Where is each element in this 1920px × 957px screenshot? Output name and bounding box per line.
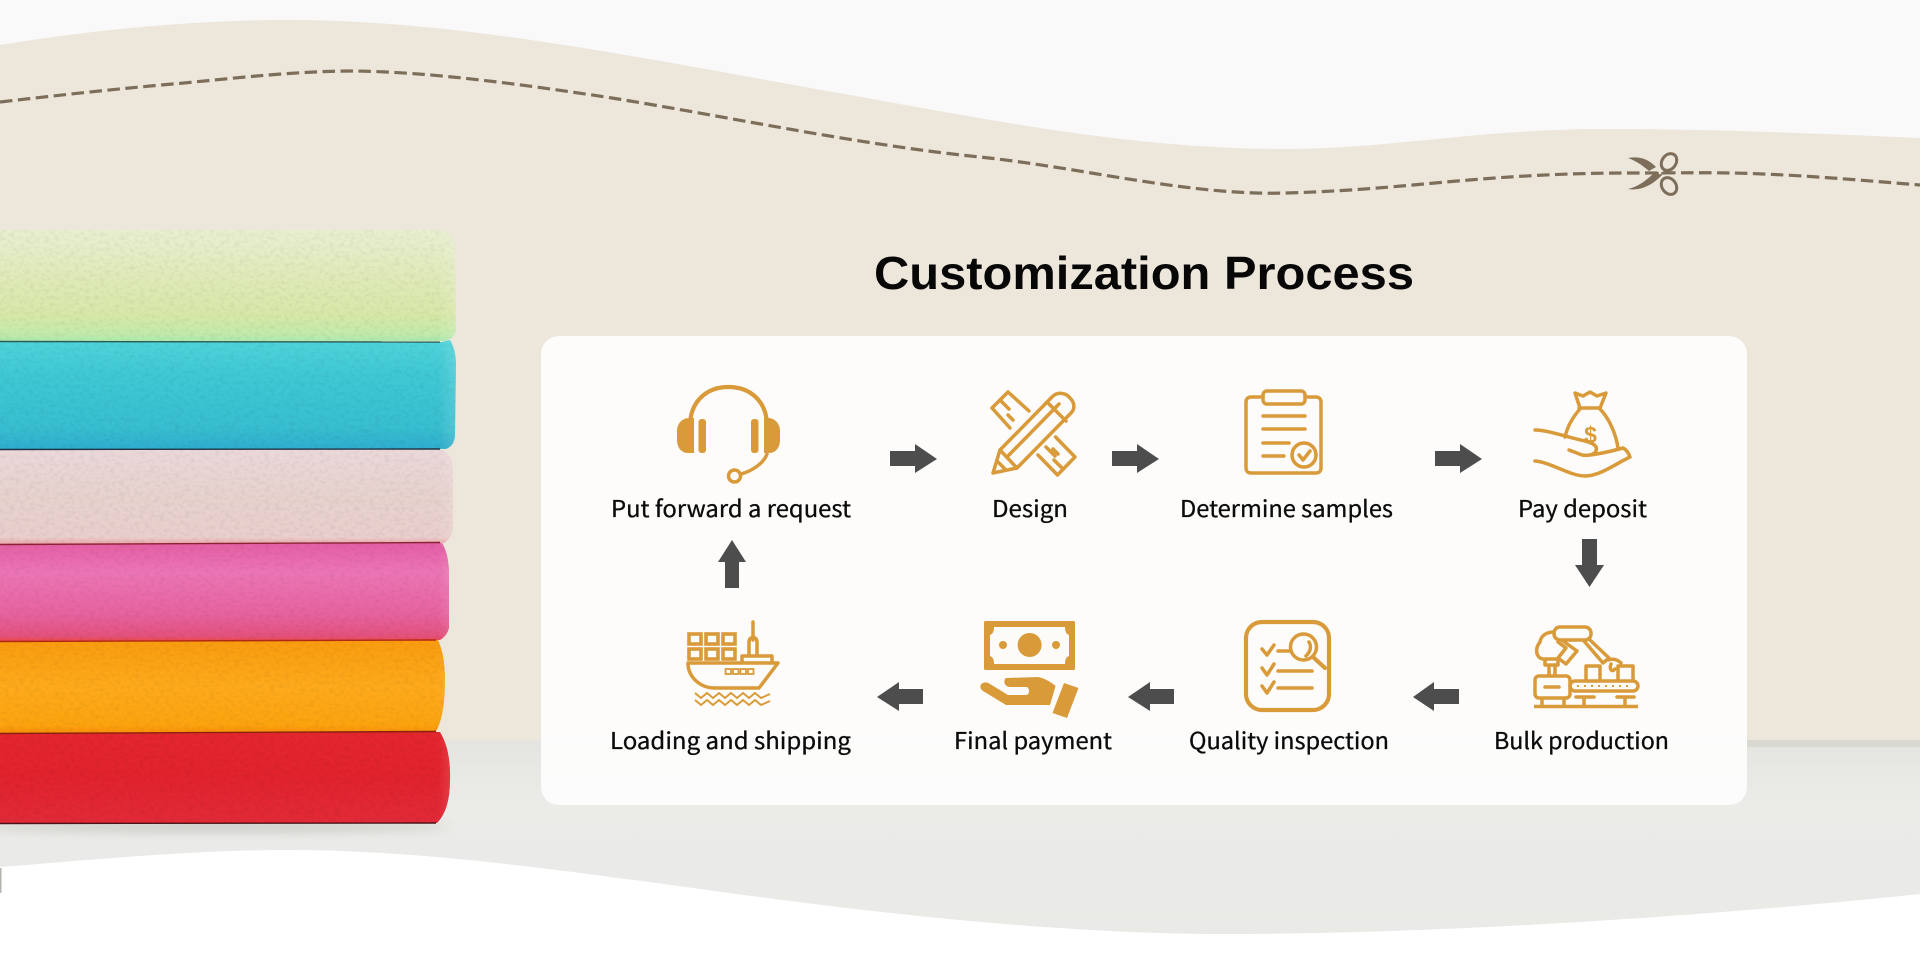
step: quality inspection xyxy=(1189,622,1389,756)
arrow xyxy=(718,540,746,588)
icon: scissors xyxy=(1628,151,1680,197)
icon: money bag on hand: $ xyxy=(1584,422,1597,448)
icon: robot arm and conveyor xyxy=(1534,627,1638,706)
label: Quality inspection xyxy=(1189,722,1389,756)
label: Final payment xyxy=(954,722,1112,756)
label: Determine samples xyxy=(1180,490,1393,524)
arrow xyxy=(1112,444,1159,473)
arrow xyxy=(1128,682,1174,711)
panel: process flow xyxy=(541,336,1747,805)
icon: cargo ship xyxy=(688,622,778,705)
icon: pencil and ruler xyxy=(992,392,1075,475)
rim highlight xyxy=(442,248,456,813)
floor xyxy=(0,740,1920,957)
arrow xyxy=(890,444,937,473)
icon: headset xyxy=(677,387,780,482)
step: final payment xyxy=(954,621,1112,756)
step: pay deposit xyxy=(1518,392,1647,524)
label: Bulk production xyxy=(1494,722,1669,756)
fold: hot pink xyxy=(0,543,449,642)
arrow xyxy=(1413,682,1459,711)
tiny edge mark xyxy=(0,868,2,893)
beige wave background xyxy=(0,20,1920,780)
step: loading and shipping xyxy=(610,622,851,756)
title: Customization Process xyxy=(874,247,1414,299)
label: Design xyxy=(992,490,1068,524)
icon: checklist with magnifier xyxy=(1246,622,1329,710)
step: design xyxy=(992,392,1075,524)
arrow xyxy=(1575,539,1604,587)
fleece texture xyxy=(0,228,458,826)
white lower wave xyxy=(0,850,1920,957)
step: determine samples xyxy=(1180,391,1393,524)
fold: orange xyxy=(0,640,445,734)
label: Pay deposit xyxy=(1518,490,1647,524)
label: Put forward a request xyxy=(611,490,851,524)
icon: banknote over hand xyxy=(980,621,1078,718)
fold: pale pink xyxy=(0,449,453,545)
seams between folds xyxy=(0,342,440,824)
step: bulk production xyxy=(1494,627,1669,756)
icon: clipboard with check xyxy=(1246,391,1321,473)
dashed cutting line xyxy=(0,71,1920,193)
fold: red xyxy=(0,732,450,823)
arrow xyxy=(1435,444,1482,473)
fabric stack photo xyxy=(0,228,458,832)
arrow xyxy=(877,682,923,711)
step: put forward a request xyxy=(611,387,851,524)
fold: light green xyxy=(0,230,456,342)
label: Loading and shipping xyxy=(610,722,851,756)
floor edge shading at right xyxy=(1747,740,1920,747)
fold: cyan xyxy=(0,340,456,450)
